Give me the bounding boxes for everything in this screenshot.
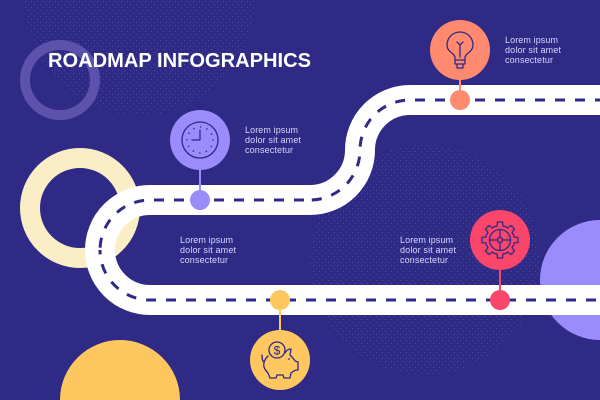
text: piggy milestone: Lorem ipsum <box>180 235 233 245</box>
yellow half circle <box>60 340 180 400</box>
text: bulb milestone: consectetur <box>505 55 553 65</box>
milestone: piggy bank <box>250 290 310 390</box>
text: clock milestone: Lorem ipsum <box>245 125 298 135</box>
icon: light bulb <box>447 32 473 68</box>
title: ROADMAP INFOGRAPHICS <box>48 50 311 72</box>
text: bulb milestone: dolor sit amet <box>505 45 561 55</box>
text: piggy milestone <box>180 235 236 265</box>
text: piggy milestone: dolor sit amet <box>180 245 236 255</box>
text: clock milestone: dolor sit amet <box>245 135 301 145</box>
text: gear milestone: dolor sit amet <box>400 245 456 255</box>
dot pattern: top left <box>25 0 255 115</box>
icon: clock <box>182 122 218 158</box>
cream ring <box>30 158 130 258</box>
text: bulb milestone: Lorem ipsum <box>505 35 558 45</box>
icon: piggy bank: $ <box>274 344 281 358</box>
milestone: gear <box>470 210 530 310</box>
text: bulb milestone <box>505 35 561 65</box>
icon: gear <box>482 222 518 258</box>
text: clock milestone: consectetur <box>245 145 293 155</box>
road <box>100 100 600 300</box>
dot pattern: centre right <box>310 145 540 375</box>
ghost ring <box>25 45 95 115</box>
text: clock milestone <box>245 125 301 155</box>
text: gear milestone: consectetur <box>400 255 448 265</box>
milestone: light bulb <box>430 20 490 110</box>
lilac half circle <box>540 220 600 340</box>
milestone: clock <box>170 110 230 210</box>
text: gear milestone <box>400 235 456 265</box>
text: piggy milestone: consectetur <box>180 255 228 265</box>
text: gear milestone: Lorem ipsum <box>400 235 453 245</box>
